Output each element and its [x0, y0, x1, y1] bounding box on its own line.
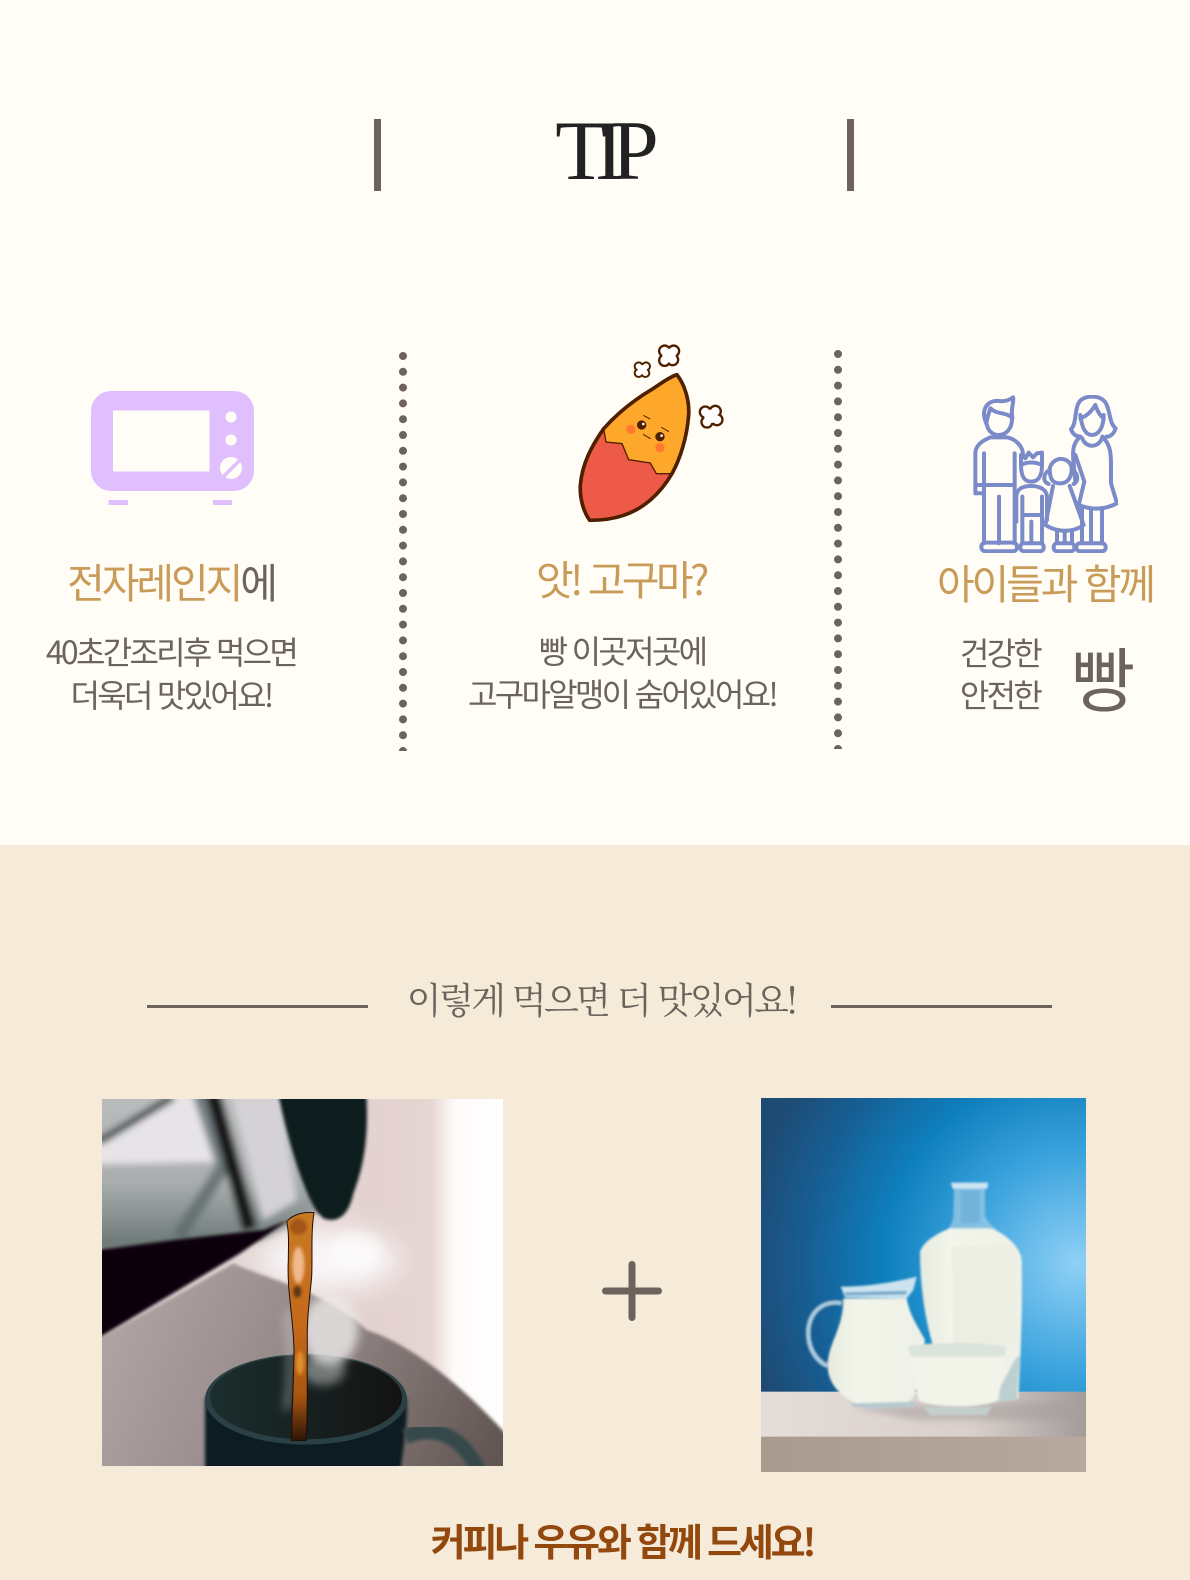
- icon: plus: [602, 1261, 662, 1321]
- title bracket right: [847, 119, 854, 191]
- icon: family: [973, 395, 1118, 553]
- text: sweet potato tip: 빵 이곳저곳에: [539, 627, 705, 673]
- text: healthy and safe: 건강한: [960, 629, 1040, 675]
- title bracket left: [374, 119, 381, 191]
- text: microwave tip: 40초간조리후 먹으면: [46, 628, 296, 674]
- icon: sweet potato: [578, 344, 724, 522]
- text: healthy and safe: 안전한: [960, 671, 1040, 717]
- heading: with kids: 아이들과 함께: [937, 551, 1153, 611]
- title: TIP: TIP: [555, 104, 647, 198]
- icon: microwave: [91, 391, 254, 505]
- photo: milk bottle, jug and glass: [761, 1098, 1086, 1472]
- photo: coffee pouring into mug: [102, 1099, 503, 1466]
- text: microwave tip: [46, 628, 296, 717]
- heading: tastes better this way: 이렇게 먹으면 더 맛있어요!: [407, 973, 795, 1024]
- panel: tip section background: [0, 0, 1190, 845]
- text: healthy and safe: [960, 629, 1042, 717]
- heading: sweet potato: 앗! 고구마?: [536, 547, 706, 607]
- text: sweet potato tip: [468, 627, 776, 716]
- heading: microwave: 전자레인지에: [67, 550, 275, 610]
- dotted divider right: [834, 350, 842, 749]
- text: bread: 빵: [1071, 626, 1135, 727]
- dotted divider left: [399, 352, 407, 751]
- text: serve with coffee or milk: 커피나 우유와 함께 드세요!: [431, 1512, 813, 1567]
- section rule right: [831, 1005, 1052, 1008]
- panel: serving section background: [0, 845, 1190, 1580]
- section rule left: [147, 1005, 368, 1008]
- text: sweet potato tip: 고구마알맹이 숨어있어요!: [468, 670, 776, 716]
- text: microwave tip: 더욱더 맛있어요!: [70, 671, 272, 717]
